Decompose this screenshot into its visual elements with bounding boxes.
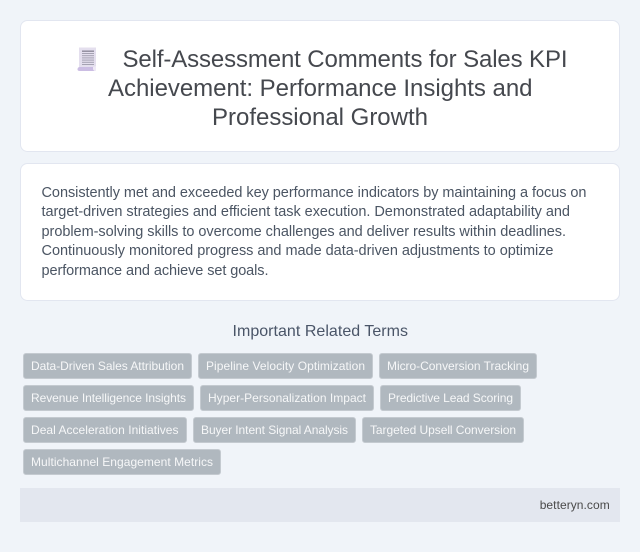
tag	[24, 450, 220, 474]
heading: related terms: Important Related Terms	[232, 323, 408, 340]
tag	[198, 354, 372, 378]
summary text: performance and achieve set goals.	[42, 263, 268, 279]
summary text: Continuously monitored progress and made data-driven adjustments to optimize	[42, 243, 554, 259]
tag: Hyper-Personalization Impact	[208, 391, 367, 405]
panel: summary	[20, 164, 620, 300]
tag	[380, 354, 536, 378]
icon: scroll document	[78, 48, 96, 71]
title text: Professional Growth	[212, 104, 428, 131]
title text: Achievement: Performance Insights and	[108, 75, 532, 102]
tag: Data-Driven Sales Attribution	[31, 359, 184, 373]
summary text: problem-solving skills to overcome challenges and deliver results within deadlines.	[42, 224, 566, 240]
tag: Micro-Conversion Tracking	[387, 359, 529, 373]
tag: Multichannel Engagement Metrics	[31, 455, 213, 469]
tag	[200, 386, 374, 410]
tag: Predictive Lead Scoring	[388, 391, 513, 405]
tag: Pipeline Velocity Optimization	[206, 359, 365, 373]
tag: Targeted Upsell Conversion	[370, 423, 516, 437]
tag	[24, 386, 194, 410]
tag: Deal Acceleration Initiatives	[31, 423, 178, 437]
summary text: target-driven strategies and efficient task execution. Demonstrated adaptability and	[42, 204, 570, 220]
footer	[20, 488, 620, 522]
tag: Buyer Intent Signal Analysis	[201, 423, 348, 437]
title text	[108, 46, 568, 131]
tag	[380, 386, 520, 410]
tag	[24, 354, 192, 378]
summary text	[42, 185, 586, 279]
tag: Revenue Intelligence Insights	[31, 391, 186, 405]
panel: title	[20, 20, 620, 152]
tag	[362, 418, 524, 442]
tag	[194, 418, 356, 442]
summary text: Consistently met and exceeded key performance indicators by maintaining a focus on	[42, 185, 586, 201]
footer site name: betteryn.com	[540, 498, 610, 512]
title text: Self-Assessment Comments for Sales KPI	[122, 46, 568, 73]
tag	[24, 418, 186, 442]
panel: term tags	[24, 354, 536, 474]
